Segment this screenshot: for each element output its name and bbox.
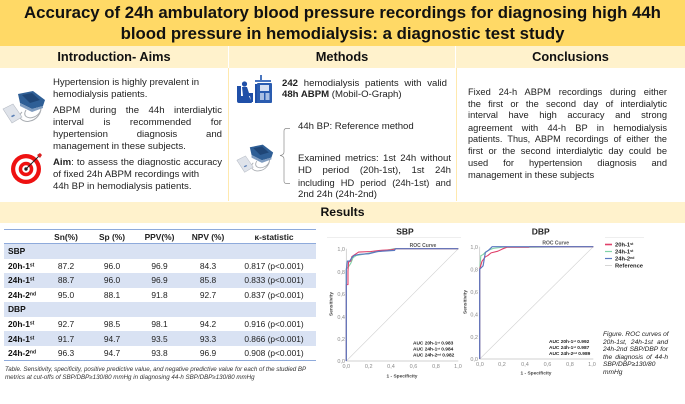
chart: SBP ROC curve: 0,8	[432, 364, 440, 370]
results table: 88.7	[58, 275, 74, 285]
chart: DBP ROC curve: 0,8	[470, 268, 478, 274]
results table: 87.2	[58, 261, 74, 271]
chart legend: 20h-1	[615, 242, 630, 248]
text block: conclusions: Fixed 24-h ABPM recordings during either	[468, 87, 667, 97]
text block: introduction: hypertension diagnosis and	[53, 129, 222, 140]
text block: introduction: 44h BP in hemodialysis patients.	[53, 181, 191, 192]
chart legend: nd	[630, 256, 634, 260]
chart: DBP ROC curve: 0,8	[566, 362, 574, 368]
text block: examined metrics: including HD period (24h-1st) and	[298, 178, 451, 188]
results table: κ-statistic	[254, 232, 294, 242]
icon: blood pressure monitor	[2, 91, 45, 124]
title line 1: Accuracy of 24h ambulatory blood pressure recordings for diagnosing high 44h	[24, 3, 661, 22]
icon: blood pressure monitor small	[236, 144, 274, 172]
chart: SBP ROC curve: 0.984	[440, 346, 454, 352]
text block: conclusions: interval have high accuracy and strong	[468, 110, 667, 120]
chart: DBP ROC curve	[462, 226, 596, 376]
chart: DBP ROC curve: 0,2	[470, 335, 478, 341]
text block: introduction: interval is recommended for	[53, 117, 222, 128]
text block: conclusions: first or the second interdialytic day could be	[468, 146, 667, 156]
results table: 92.7	[58, 319, 74, 329]
chart: DBP ROC curve: 1 - Specificity	[521, 370, 552, 376]
text block: examined metrics: 2nd 24h (24h-2nd)	[298, 189, 377, 200]
chart: SBP ROC curve: st	[437, 346, 440, 350]
heading: results: Results	[320, 205, 365, 219]
heading: methods	[229, 46, 455, 68]
chart: SBP ROC curve: AUC 24h-2	[413, 354, 437, 358]
chart: SBP ROC curve: AUC 24h-1	[413, 348, 437, 352]
chart: SBP ROC curve: 0.982	[441, 352, 455, 358]
text block: conclusions: patients. Thus, ABPM recordings of either the	[468, 134, 667, 144]
chart: DBP ROC curve: 1,0	[588, 362, 596, 368]
results table: 94.7	[104, 334, 120, 344]
results table: PPV(%)	[145, 232, 174, 242]
chart legend: 24h-2	[615, 256, 630, 262]
chart: DBP ROC curve: AUC 24h-2	[549, 352, 573, 357]
chart: DBP ROC curve: nd	[573, 351, 577, 355]
results table: 93.3	[200, 334, 216, 344]
results table: Sp (%)	[99, 232, 125, 242]
chart: SBP ROC curve: 0,0	[342, 364, 350, 370]
results table: 96.0	[104, 261, 120, 271]
heading: conclusions: Conclusions	[532, 49, 609, 64]
chart: SBP ROC curve: AUC 20h-1	[413, 342, 437, 346]
title banner	[0, 0, 685, 46]
results table: DBP	[8, 304, 26, 314]
chart: SBP ROC curve: st	[437, 340, 440, 344]
text block: conclusions	[468, 87, 667, 180]
text block: patients: 242 hemodialysis patients with valid	[282, 78, 447, 89]
results table: 98.5	[104, 319, 120, 329]
text block: examined metrics	[298, 153, 451, 200]
chart legend: st	[630, 249, 634, 253]
chart: SBP ROC curve: nd	[437, 352, 441, 356]
results table: 96.0	[104, 275, 120, 285]
results table: 0.908 (p<0.001)	[244, 348, 304, 358]
figure caption: 24h-2nd SBP/DBP for	[603, 346, 668, 353]
chart: DBP ROC curve: 0,6	[470, 290, 478, 296]
chart: SBP ROC curve: 0,4	[387, 364, 395, 370]
heading: results	[0, 202, 685, 223]
chart: SBP ROC curve: 0,2	[337, 337, 345, 343]
results table: 91.8	[151, 290, 168, 300]
figure caption: mmHg	[603, 369, 622, 376]
results table: 91.7	[58, 334, 74, 344]
results table: 98.1	[151, 319, 168, 329]
results table: 24h-2nd	[8, 290, 36, 300]
chart: SBP ROC curve: Sensitivity	[328, 292, 334, 316]
chart: SBP ROC curve: 0,8	[337, 270, 345, 276]
text block: conclusions: the first or the second day of interdialytic	[468, 99, 667, 109]
text block: introduction: Aim: to assess the diagnostic accuracy	[53, 157, 222, 168]
table caption: metrics at cut-offs of SBP/DBP≥130/80 mmHg in diagnosing 44-h SBP/DBP≥130/80 mmHg	[5, 374, 255, 381]
chart: SBP ROC curve: 1,0	[454, 364, 462, 370]
results table: 0.866 (p<0.001)	[244, 334, 304, 344]
results table: 20h-1st	[8, 319, 34, 329]
text block: introduction: hemodialysis patients.	[53, 88, 147, 100]
text block: introduction	[53, 77, 222, 192]
chart: SBP ROC curve: 0.983	[440, 340, 454, 346]
chart: DBP ROC curve: 0,0	[470, 357, 478, 363]
results table: 0.817 (p<0.001)	[244, 261, 304, 271]
figure caption	[603, 331, 670, 376]
results table: SBP	[8, 246, 25, 256]
results table: 88.1	[104, 290, 120, 300]
chart legend: 24h-1	[615, 250, 630, 256]
chart legend: st	[630, 242, 634, 246]
results table: 84.3	[200, 261, 216, 271]
results table: 24h-2nd	[8, 348, 36, 358]
chart: DBP ROC curve: 0.992	[576, 339, 590, 345]
results table: 96.9	[200, 348, 216, 358]
results table: NPV (%)	[192, 232, 224, 242]
chart: DBP ROC curve: 0,2	[498, 362, 506, 368]
chart: DBP ROC curve: 0,4	[521, 362, 529, 368]
results table: 95.0	[58, 290, 74, 300]
text block: patients	[282, 78, 447, 100]
results table: 94.7	[104, 348, 120, 358]
figure caption: SBP/DBP≥130/80	[603, 361, 655, 368]
chart: DBP ROC curve: 0,4	[470, 312, 478, 318]
results table: Sn(%)	[54, 232, 78, 242]
chart: SBP ROC curve: SBP	[396, 226, 414, 236]
text block: conclusions: used for hypertension diagnosis and	[468, 158, 667, 168]
results table: 0.833 (p<0.001)	[244, 275, 304, 285]
icon: target with arrow	[11, 153, 42, 184]
icon: hemodialysis patient and machine	[237, 75, 272, 103]
table caption: Table. Sensitivity, specificity, positive predictive value, and negative predictive value for each of the studied BP	[5, 366, 306, 373]
results table: 0.837 (p<0.001)	[244, 290, 304, 300]
results table: 94.2	[200, 319, 216, 329]
chart: SBP ROC curve: 1 - Specificity	[387, 374, 418, 380]
text block: examined metrics: HD period (20h-1st), 1st 24h	[298, 165, 451, 176]
text block: introduction: of fixed 24h ABPM recordings with	[53, 169, 199, 180]
chart: DBP ROC curve: DBP	[532, 226, 550, 236]
figure caption: Figure. ROC curves of	[603, 331, 669, 338]
chart: SBP ROC curve: 0,4	[337, 315, 345, 321]
chart: DBP ROC curve: Sensitivity	[462, 290, 468, 314]
results table: 24h-1st	[8, 334, 34, 344]
chart: DBP ROC curve: AUC 24h-1	[549, 346, 573, 351]
chart: SBP ROC curve: ROC Curve	[410, 243, 437, 249]
results table: 93.8	[151, 348, 168, 358]
results table: 96.9	[151, 275, 168, 285]
text block: conclusions: management in these subjects	[468, 170, 594, 180]
chart: DBP ROC curve: 0.987	[576, 345, 590, 351]
text block: patients: 48h ABPM (Mobil-O-Graph)	[282, 89, 402, 100]
results table: 24h-1st	[8, 275, 34, 285]
results table: 92.7	[200, 290, 216, 300]
brace	[280, 128, 290, 184]
chart: SBP ROC curve: 0,6	[410, 364, 417, 370]
text block: reference method: 44h BP: Reference method	[298, 121, 414, 132]
heading: methods: Methods	[316, 49, 368, 64]
results table	[4, 229, 316, 361]
results table: 0.916 (p<0.001)	[244, 319, 304, 329]
chart legend: Reference	[615, 264, 644, 270]
figure caption: 20h-1st, 24h-1st and	[603, 338, 668, 346]
heading: conclusions	[456, 46, 685, 68]
text block: introduction: management in these subjects.	[53, 141, 186, 152]
chart: DBP ROC curve: 1,0	[470, 245, 478, 251]
text block: examined metrics: Examined metrics: 1st 24h without	[298, 153, 451, 164]
heading: introduction	[0, 46, 228, 68]
chart: DBP ROC curve: 0,6	[544, 362, 551, 368]
results table: 85.8	[200, 275, 216, 285]
chart: SBP ROC curve	[327, 226, 462, 380]
chart: SBP ROC curve: 1,0	[337, 247, 345, 253]
results table: 96.9	[151, 261, 168, 271]
chart: DBP ROC curve: AUC 20h-1	[549, 340, 573, 345]
chart: DBP ROC curve: ROC Curve	[542, 240, 569, 246]
text block: conclusions: agreement with 44-h BP in hemodialysis	[468, 122, 667, 132]
results table: 93.5	[151, 334, 168, 344]
chart: SBP ROC curve: 0,6	[337, 292, 345, 298]
chart legend	[605, 237, 644, 270]
figure caption: the diagnosis of 44-h	[603, 354, 668, 360]
chart: DBP ROC curve: 0,0	[476, 362, 484, 368]
chart: DBP ROC curve: st	[573, 339, 576, 343]
chart: SBP ROC curve: 0,0	[337, 359, 345, 365]
chart: DBP ROC curve: 0.989	[577, 351, 591, 357]
table caption	[5, 366, 306, 381]
results table: 20h-1st	[8, 261, 34, 271]
chart: DBP ROC curve: st	[573, 345, 576, 349]
text block: introduction: Hypertension is highly prevalent in	[53, 77, 199, 88]
heading: introduction: Introduction- Aims	[57, 49, 171, 64]
text block: introduction: ABPM during the 44h interdialytic	[53, 105, 222, 116]
chart: SBP ROC curve: 0,2	[365, 364, 373, 370]
title line 2: blood pressure in hemodialysis: a diagnostic test study	[121, 24, 564, 43]
results table: 96.3	[58, 348, 74, 358]
